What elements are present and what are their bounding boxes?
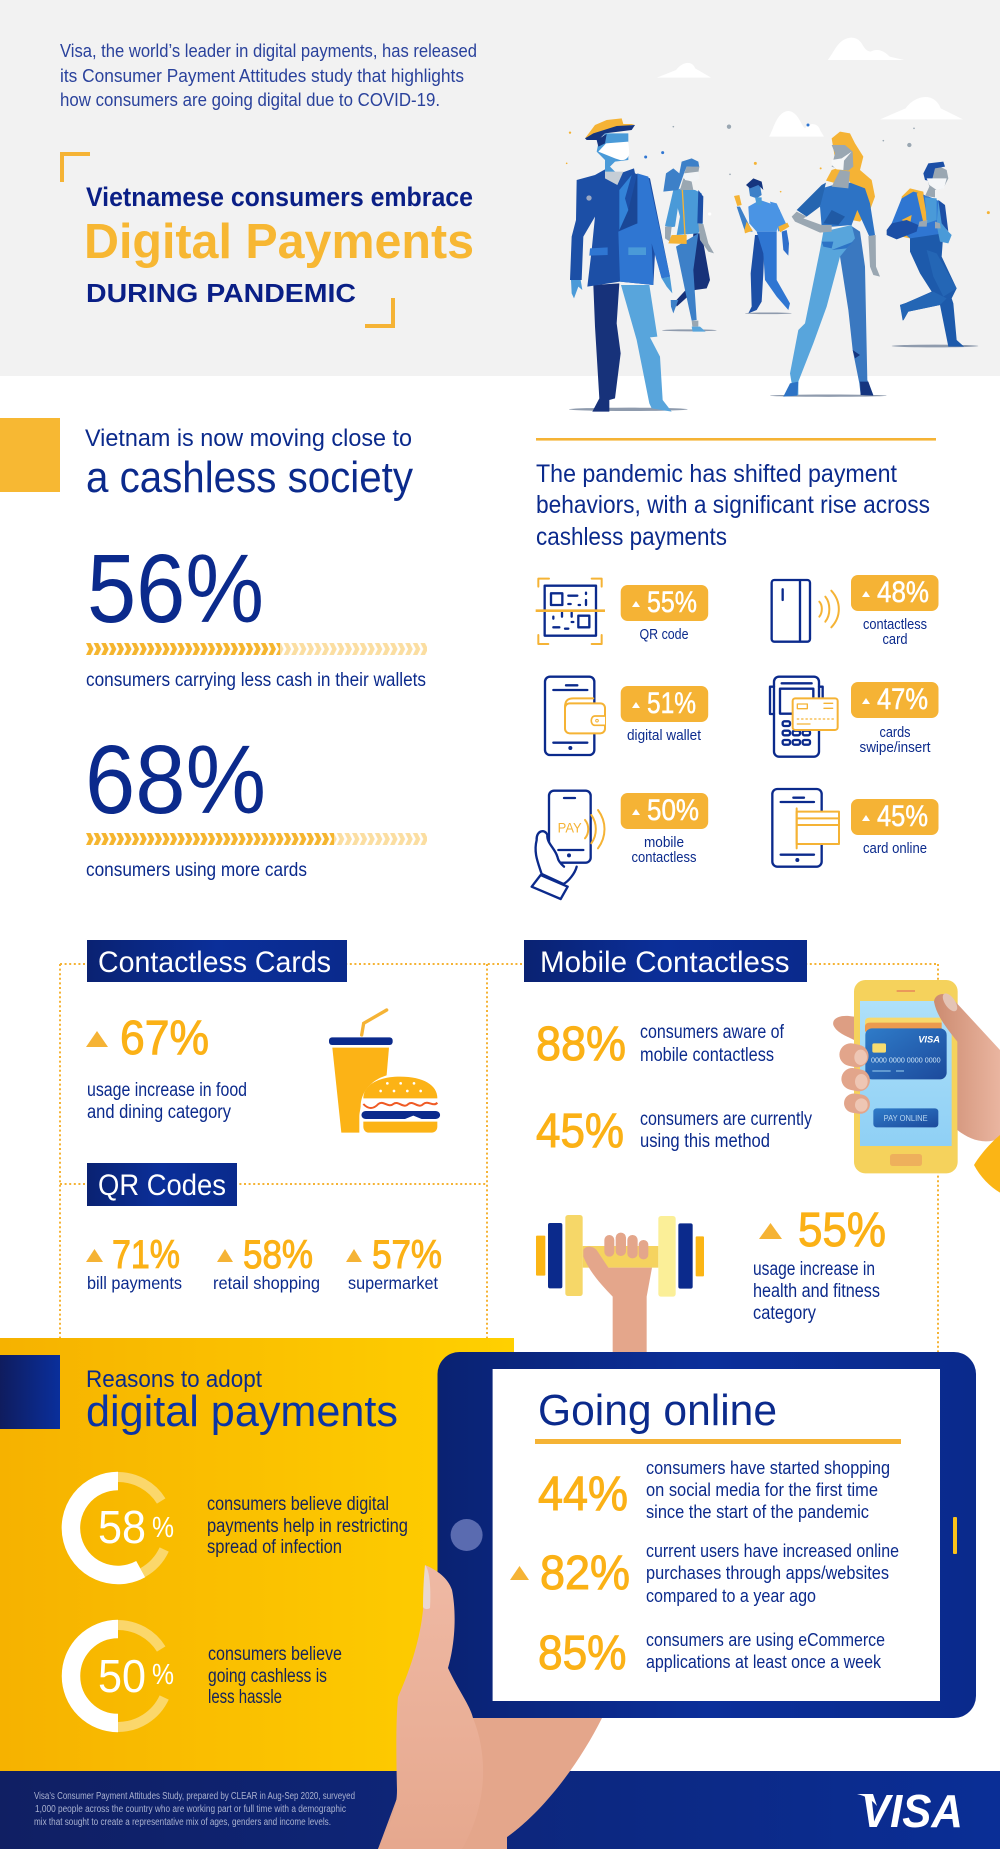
- heading: cashless society: a cashless society: [86, 453, 413, 502]
- stat: 88 percent aware: [536, 1018, 785, 1071]
- illustration: clouds: [657, 38, 963, 137]
- footnote: mix that sought to create a representative mix of ages, genders and income levels.: [34, 1817, 331, 1828]
- stat: 44 percent social media: [538, 1457, 890, 1522]
- stat: retail shopping: retail shopping: [213, 1273, 320, 1293]
- heading tag: Mobile Contactless: [540, 946, 790, 979]
- stat: 88 percent aware: 88%: [536, 1018, 626, 1071]
- confetti dots: [566, 124, 757, 216]
- section marker: [0, 1355, 60, 1429]
- intro text: [60, 40, 477, 110]
- panel: reasons to adopt digital payments: [0, 1338, 514, 1771]
- intro text: how consumers are going digital due to COVID-19.: [60, 89, 440, 110]
- icon: card terminal: [770, 677, 838, 757]
- illustration: hand holding phone: PAY ONLINE: [884, 1113, 928, 1123]
- title block: [62, 154, 474, 326]
- text: less hassle: [208, 1644, 342, 1708]
- stat: 82 percent online purchases: compared to a year ago: [646, 1585, 816, 1606]
- heading: cashless society: Vietnam is now moving close to: [85, 425, 412, 452]
- icon: contactless card: [772, 580, 839, 642]
- text: restricting infection: consumers believe digital: [207, 1494, 389, 1515]
- badge: mobile contactless 50: [621, 793, 708, 866]
- heading: cashless society: [85, 425, 413, 502]
- stat: 85 percent eCommerce: [538, 1627, 885, 1680]
- header background panel: [0, 0, 1000, 376]
- badge: mobile contactless 50: 50%: [647, 794, 699, 827]
- hand: [833, 991, 1000, 1193]
- heading: pandemic shift: cashless payments: [536, 523, 727, 551]
- title block: Vietnamese consumers embrace: [86, 182, 473, 212]
- donut: 50 percent: %: [152, 1659, 174, 1691]
- stat: 55 percent health and fitness: 55%: [798, 1204, 886, 1257]
- stat: 44 percent social media: consumers have started shopping: [646, 1457, 890, 1478]
- logo: Visa: VISA: [861, 1785, 963, 1837]
- stat: retail shopping: 58%: [243, 1233, 313, 1277]
- illustration: hand holding phone: [833, 980, 1000, 1193]
- badge: cards swipe or insert 47: 47%: [877, 683, 928, 716]
- stat: 44 percent social media: on social media for the first time: [646, 1479, 878, 1500]
- heading: pandemic shift: behaviors, with a significant rise across: [536, 491, 930, 519]
- donut: 58 percent: %: [152, 1512, 174, 1544]
- badge: digital wallet 51: digital wallet: [627, 728, 701, 744]
- stat: 45 percent using: consumers are currently: [640, 1109, 812, 1130]
- text: restricting infection: [207, 1494, 408, 1558]
- donut: 50 percent: [71, 1625, 174, 1727]
- stat: supermarket: 57%: [372, 1233, 442, 1277]
- panel: mobile contactless: [524, 940, 1000, 1352]
- text: less hassle: less hassle: [208, 1687, 282, 1708]
- stat: 55 percent health and fitness: [753, 1204, 886, 1324]
- heading: Reasons to adopt: [86, 1366, 262, 1393]
- text: restricting infection: spread of infection: [207, 1537, 342, 1558]
- stat: retail shopping: [213, 1233, 320, 1293]
- footnote: Visa’s Consumer Payment Attitudes Study, prepared by CLEAR in Aug-Sep 2020, surveyed: [34, 1791, 355, 1802]
- footnote: [34, 1791, 355, 1828]
- icon: QR code: [536, 579, 605, 644]
- badge: contactless card 48: card: [882, 632, 908, 648]
- stat: 67 percent: [86, 1012, 247, 1123]
- donut: 58 percent: 58: [98, 1501, 146, 1553]
- home button: [451, 1519, 483, 1551]
- yellow section marker: [0, 418, 60, 492]
- stat: 85 percent eCommerce: consumers are using eCommerce: [646, 1629, 885, 1650]
- stat: supermarket: supermarket: [348, 1273, 438, 1293]
- stat: 55 percent health and fitness: category: [753, 1303, 816, 1324]
- heading: [86, 1366, 398, 1436]
- stat: 82 percent online purchases: [510, 1540, 899, 1606]
- text: less hassle: going cashless is: [208, 1666, 327, 1687]
- stat: bill payments: bill payments: [87, 1273, 182, 1293]
- text: less hassle: consumers believe: [208, 1644, 342, 1665]
- stat: 85 percent eCommerce: 85%: [538, 1627, 626, 1680]
- icon: drink and burger: [329, 1010, 443, 1135]
- panel: contactless cards: [86, 940, 443, 1135]
- panel: QR codes: [86, 1163, 442, 1293]
- illustration: tablet: [438, 1352, 976, 1718]
- badge: contactless card 48: 48%: [877, 576, 929, 609]
- confetti dots: [780, 123, 990, 214]
- badge: card online 45: [851, 799, 938, 857]
- stat: 55 percent health and fitness: usage increase in: [753, 1259, 875, 1280]
- illustration: masked people, right group: [770, 123, 990, 397]
- payment method grid: [532, 575, 938, 899]
- intro text: its Consumer Payment Attitudes study that highlights: [60, 65, 464, 86]
- stat: 68 percent using more cards: [85, 725, 427, 881]
- badge: cards swipe or insert 47: swipe/insert: [860, 740, 930, 756]
- stat: 88 percent aware: mobile contactless: [640, 1045, 774, 1066]
- stat: 88 percent aware: consumers aware of: [640, 1022, 785, 1043]
- stat: bill payments: 71%: [112, 1233, 180, 1277]
- badge: card online 45: 45%: [877, 800, 928, 833]
- donut: 58 percent: [71, 1477, 174, 1575]
- heading: digital payments: [86, 1387, 398, 1436]
- badge: QR code 55: [621, 585, 708, 643]
- illustration: hand holding phone: VISA: [918, 1035, 940, 1045]
- stat: 68 percent using more cards: consumers using more cards: [86, 859, 307, 881]
- donut: 50 percent: 50: [98, 1650, 146, 1702]
- badge: contactless card 48: [851, 575, 938, 648]
- icon: digital wallet: [545, 677, 605, 755]
- badge: cards swipe or insert 47: [851, 682, 938, 756]
- badge: QR code 55: QR code: [640, 627, 688, 643]
- stat: 55 percent health and fitness: health and fitness: [753, 1281, 880, 1302]
- badge: mobile contactless 50: mobile: [644, 835, 684, 851]
- stat: 82 percent online purchases: current users have increased online: [646, 1540, 899, 1561]
- badge: mobile contactless 50: contactless: [632, 850, 696, 866]
- screen: [493, 1369, 940, 1701]
- illustration: masked people, left group: [566, 118, 792, 412]
- stat: 67 percent: and dining category: [87, 1102, 231, 1123]
- person: man with hat: [569, 118, 688, 412]
- heading tag: QR Codes: [98, 1169, 226, 1202]
- badge: digital wallet 51: [621, 686, 708, 744]
- stat: 68 percent using more cards: 68%: [85, 725, 266, 834]
- stat: 44 percent social media: 44%: [538, 1468, 628, 1521]
- person: woman with yellow hair: [770, 132, 887, 397]
- stat: bill payments: [86, 1233, 182, 1293]
- heading: pandemic shift: The pandemic has shifted payment: [536, 460, 897, 488]
- stat: 82 percent online purchases: 82%: [540, 1547, 630, 1600]
- stat: supermarket: [346, 1233, 442, 1293]
- heading: going online: Going online: [538, 1386, 777, 1435]
- stat: 56 percent carrying less cash: consumers carrying less cash in their wallets: [86, 669, 426, 691]
- title block: Digital Payments: [84, 215, 474, 269]
- stat: 56 percent carrying less cash: 56%: [87, 534, 264, 643]
- text: restricting infection: payments help in restricting: [207, 1516, 408, 1537]
- badge: digital wallet 51: 51%: [647, 687, 696, 720]
- stat: 44 percent social media: since the start of the pandemic: [646, 1501, 869, 1522]
- badge: cards swipe or insert 47: cards: [880, 725, 910, 741]
- stat: 67 percent: 67%: [120, 1012, 209, 1065]
- footer band: [0, 1771, 1000, 1849]
- intro text: Visa, the world’s leader in digital payments, has released: [60, 40, 477, 61]
- stat: 56 percent carrying less cash: [86, 534, 427, 691]
- illustration: hand lifting dumbbell: [536, 1215, 704, 1352]
- icon: mobile contactless: [532, 791, 604, 899]
- person: man with backpack: [887, 162, 978, 347]
- stat: 45 percent using: using this method: [640, 1131, 770, 1152]
- palm behind tablet: [378, 1700, 602, 1849]
- icon: mobile contactless: PAY: [558, 820, 582, 836]
- stat: 85 percent eCommerce: applications at least once a week: [646, 1651, 882, 1672]
- badge: card online 45: card online: [863, 841, 927, 857]
- stat: 45 percent using: 45%: [536, 1105, 624, 1158]
- stat: 45 percent using: [536, 1105, 812, 1158]
- heading: going online: [535, 1386, 901, 1444]
- side button: [953, 1517, 957, 1554]
- badge: contactless card 48: contactless: [863, 617, 927, 633]
- heading tag: Contactless Cards: [98, 946, 331, 979]
- dotted section frame: [60, 964, 938, 1352]
- person: man with phone: [734, 178, 792, 314]
- heading: pandemic shift: [536, 438, 936, 551]
- badge: QR code 55: 55%: [647, 586, 697, 619]
- illustration: hand holding phone: 0000 0000 0000 0000: [871, 1055, 941, 1064]
- illustration: hand holding tablet: [378, 1565, 602, 1849]
- stat: 67 percent: usage increase in food: [87, 1080, 247, 1101]
- title block: DURING PANDEMIC: [86, 280, 356, 308]
- icon: card online: [772, 789, 839, 867]
- footnote: 1,000 people across the country who are working part or full time with a demographic: [35, 1804, 346, 1815]
- stat: 82 percent online purchases: purchases through apps/websites: [646, 1562, 889, 1583]
- person: woman with bag: [662, 158, 717, 332]
